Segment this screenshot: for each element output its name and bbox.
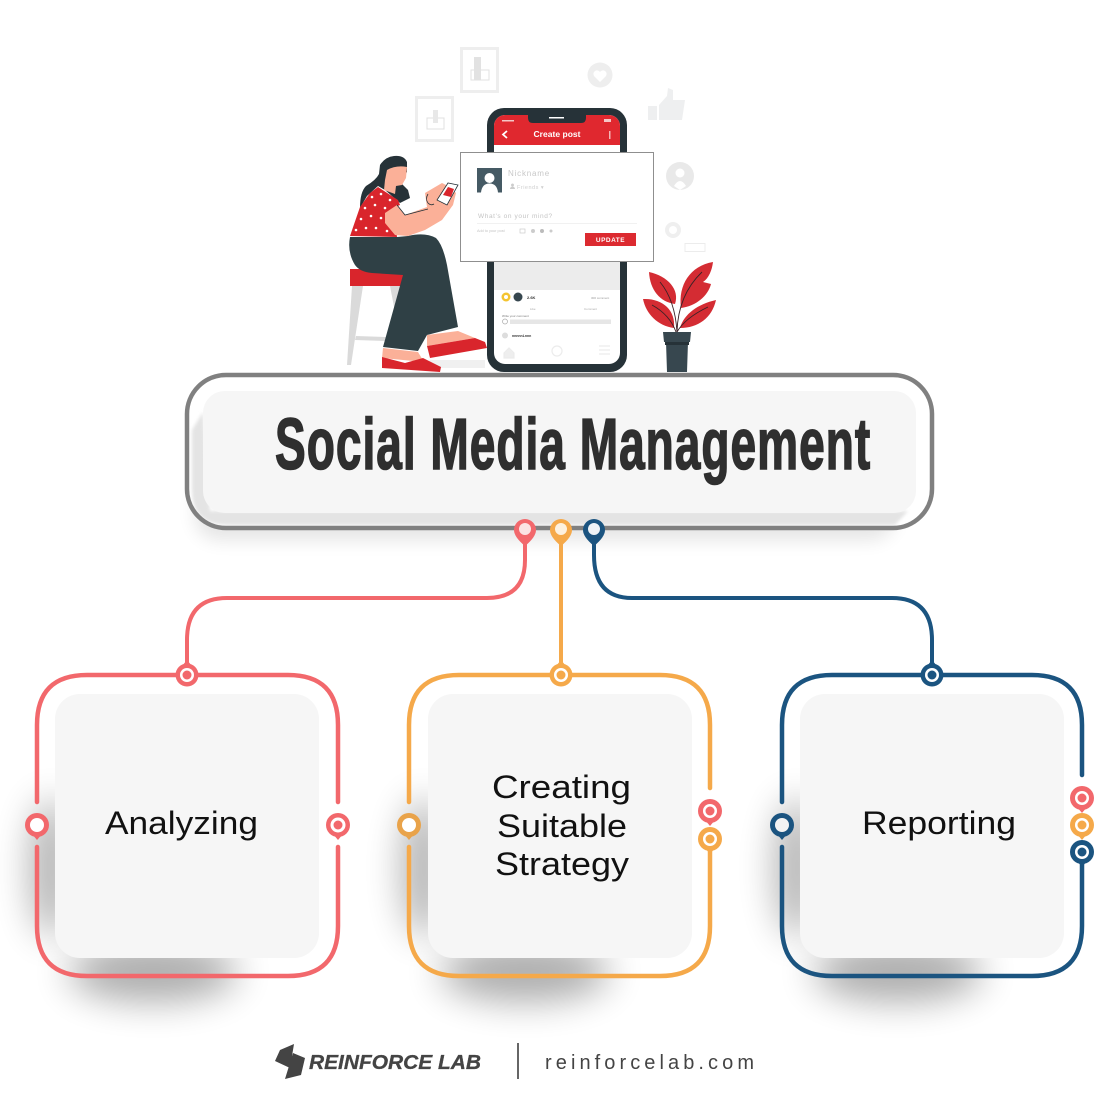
connector: red — [187, 530, 525, 675]
feet — [382, 331, 475, 362]
label — [492, 769, 631, 882]
reactions row: nnnnnLnnn — [512, 334, 531, 338]
title: Social Media Management — [275, 403, 870, 484]
icon: faint chat bubble — [685, 244, 705, 252]
footer logo — [275, 1044, 481, 1079]
add to post: Add to your post — [477, 229, 506, 233]
update button: UPDATE — [596, 237, 625, 244]
label: Analyzing — [105, 805, 258, 841]
reactions row: 2.6K — [527, 295, 536, 300]
illustration: woman posting on phone — [347, 48, 716, 372]
icon: faint heart circle — [588, 62, 612, 88]
shoes — [382, 338, 487, 372]
phone — [487, 108, 627, 372]
hair — [360, 156, 410, 208]
icon: faint picture frame top — [462, 48, 498, 92]
friends: Friends ▾ — [517, 185, 544, 191]
label: Strategy — [495, 846, 629, 882]
icon: faint avatar — [666, 162, 694, 190]
update button — [585, 233, 636, 246]
avatar — [477, 168, 502, 192]
connector: orange — [559, 530, 563, 675]
node: top — [920, 660, 944, 686]
arm and hands — [385, 183, 456, 236]
panel: analyzing — [25, 660, 350, 1002]
connector: blue — [594, 530, 932, 675]
node: left — [25, 813, 49, 840]
add to post — [477, 229, 552, 233]
node: orange top — [550, 519, 572, 546]
stool — [347, 269, 485, 368]
node: blue top — [583, 519, 605, 546]
node: top — [550, 660, 572, 686]
prompt: What's on your mind? — [478, 213, 553, 220]
icon: brand mark — [275, 1044, 305, 1079]
reactions row: 300 comment — [591, 296, 609, 300]
reactions row: Comment — [584, 307, 597, 311]
main title panel — [187, 375, 932, 540]
node: left — [770, 813, 794, 840]
brand name: REINFORCE LAB — [309, 1052, 481, 1074]
node: right orange — [1070, 813, 1094, 840]
website: reinforcelab.com — [545, 1052, 754, 1074]
node: right — [326, 813, 350, 840]
reactions row: Write your comment — [502, 314, 529, 318]
reactions row — [502, 292, 611, 338]
node: right red — [1070, 786, 1094, 813]
panel: creating suitable strategy — [397, 660, 722, 1002]
icon: faint small heart — [665, 222, 681, 238]
shirt — [350, 187, 400, 237]
trousers — [349, 234, 458, 351]
divider — [517, 1043, 519, 1079]
held phone — [437, 183, 458, 205]
node: left — [397, 813, 421, 840]
node: right red — [698, 799, 722, 826]
post card — [460, 152, 654, 262]
nickname: Nickname — [508, 169, 550, 178]
icon: back arrow — [503, 131, 507, 138]
label: Suitable — [497, 808, 627, 844]
woman — [349, 156, 487, 372]
reactions row: Like — [530, 307, 536, 311]
node: right orange — [698, 827, 722, 854]
label: Reporting — [862, 805, 1016, 841]
icon: faint thumbs up — [648, 88, 685, 120]
panel: reporting — [770, 660, 1094, 1002]
node: top — [176, 660, 198, 686]
label: Creating — [492, 769, 631, 805]
icon: faint picture frame left — [416, 98, 452, 140]
node: red top — [514, 519, 536, 546]
node: right blue — [1070, 840, 1094, 867]
phone header title: Create post — [534, 129, 581, 139]
plant — [643, 262, 716, 372]
face — [384, 166, 407, 194]
phone nav icons — [504, 346, 610, 358]
